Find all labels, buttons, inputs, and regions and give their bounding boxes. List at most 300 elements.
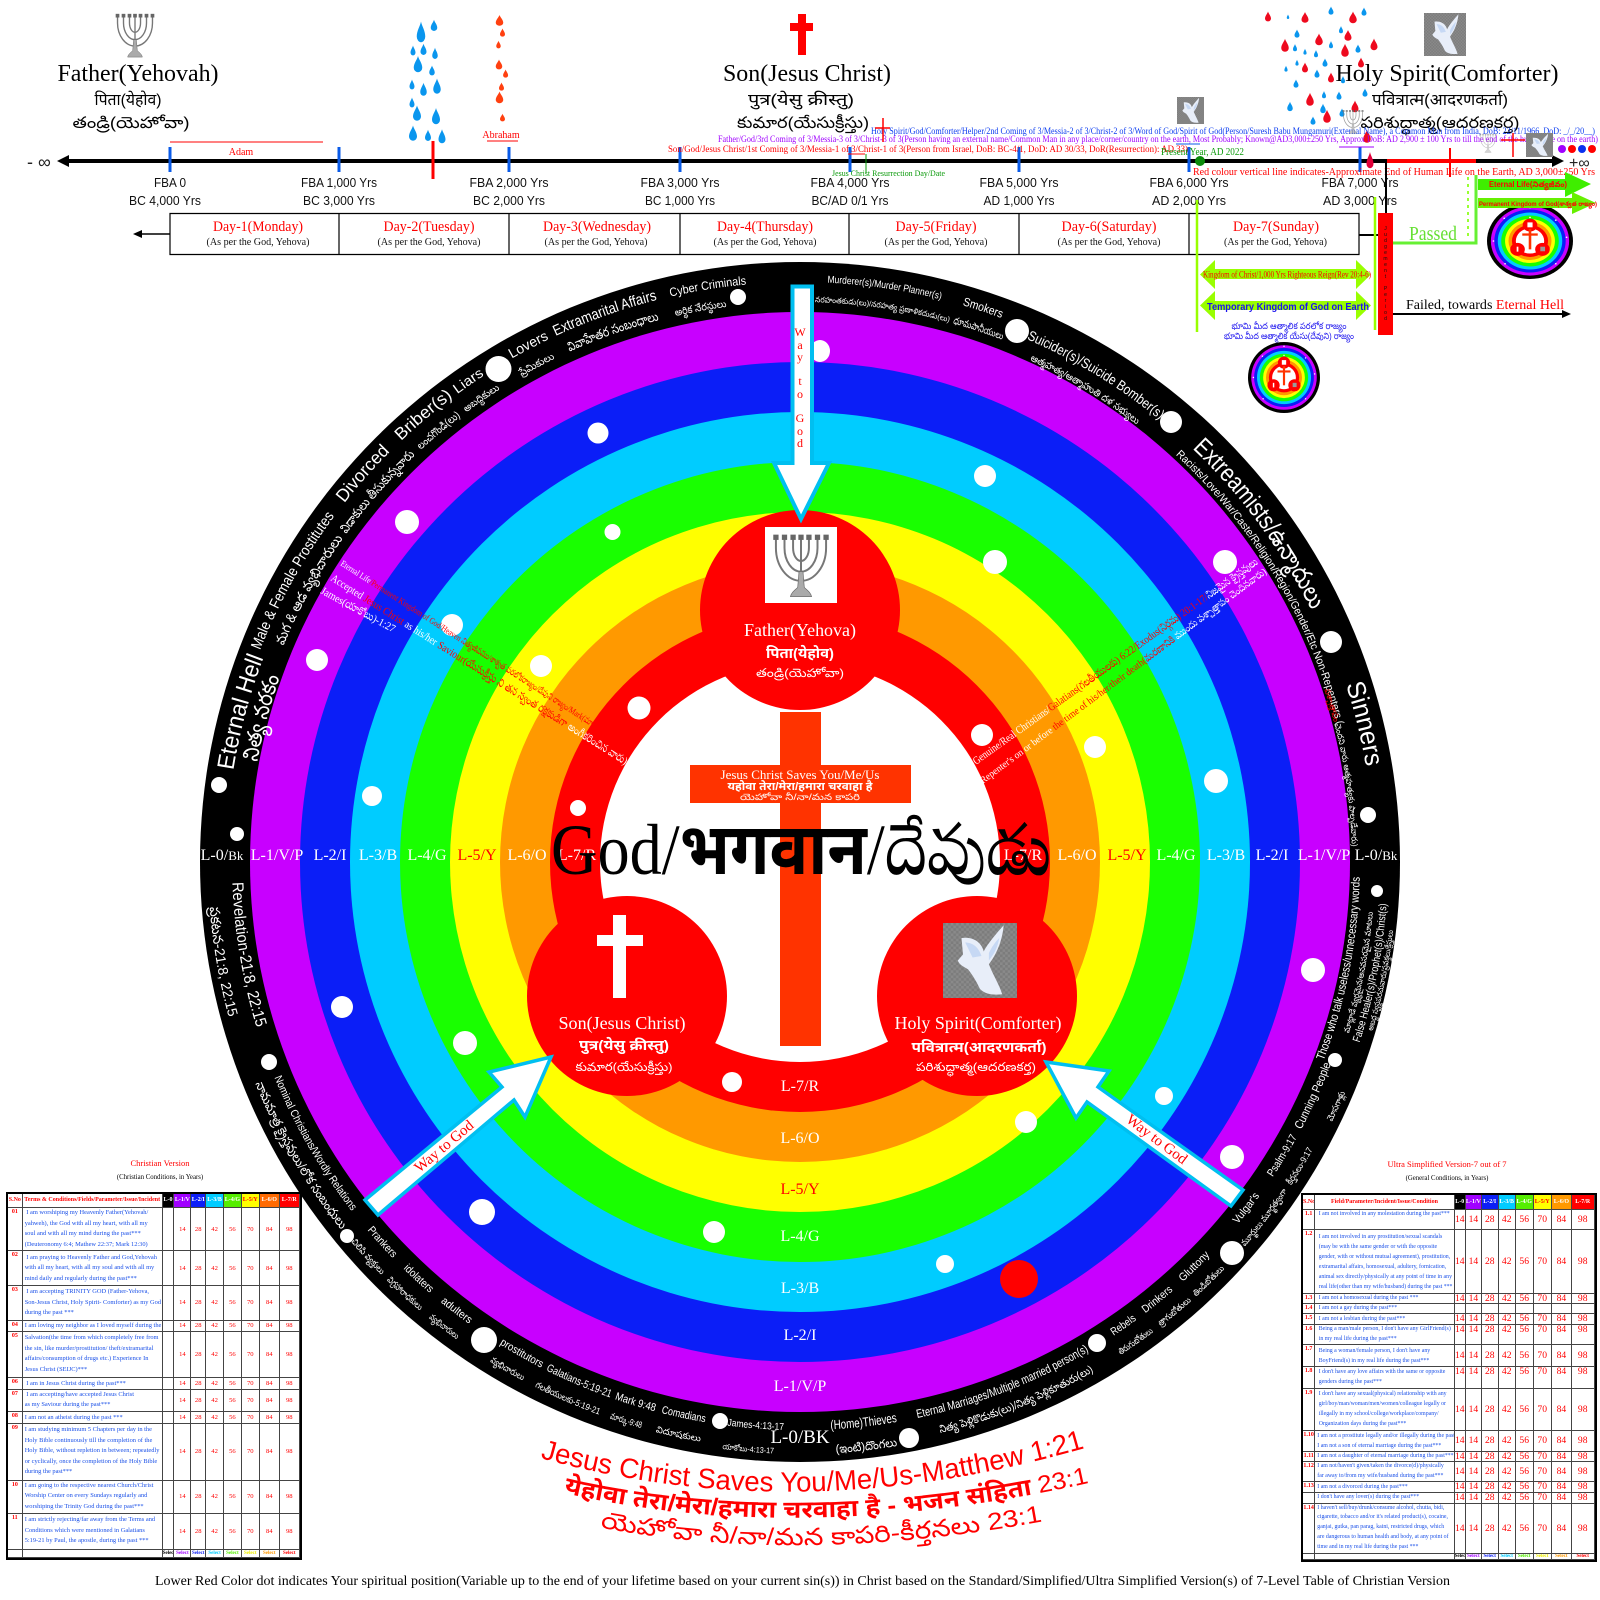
- ring label: Nominal Christians: Nominal Christians/Wordly Relations: [274, 1075, 356, 1210]
- table: Christian Version: 14: [179, 1322, 186, 1329]
- ring label: adulters: adulters: [441, 1298, 472, 1323]
- icon: white cross: [597, 915, 643, 998]
- table: Ultra Simplified Version: 14: [1455, 1350, 1465, 1361]
- table: Ultra Simplified Version: 14: [1455, 1214, 1465, 1225]
- bottom curved title: Hindi psalm: येहोवा तेरा/मेरा/हमारा चरवाहा है - भजन संहिता 23:1: [562, 1462, 1090, 1524]
- table: Ultra Simplified Version: 98: [1578, 1466, 1588, 1477]
- table: Christian Version: during the past ***: [25, 1309, 74, 1316]
- table: Ultra Simplified Version: 28: [1485, 1256, 1495, 1267]
- table: Ultra Simplified Version: 28: [1485, 1214, 1495, 1225]
- judgement period bar: t: [1385, 274, 1387, 280]
- table: Ultra Simplified Version: 1.14: [1303, 1505, 1314, 1511]
- table: Ultra Simplified Version: Select: [1555, 1554, 1568, 1559]
- arrow: way to God from lower left: Way to God: [412, 1117, 478, 1176]
- level labels: vertical column: L-0/BK: [770, 1427, 830, 1448]
- table: Christian Version: 01: [12, 1209, 18, 1215]
- table: Ultra Simplified Version: 1.1: [1305, 1211, 1312, 1217]
- table: Christian Version: Salvation(the time from which completely free from: [25, 1334, 158, 1341]
- heading: Father: Father(Yehovah): [58, 61, 218, 87]
- ring label: Cyber Criminals: [670, 276, 746, 318]
- table: Christian Version: 70: [247, 1299, 254, 1306]
- judgement period bar: n: [1384, 268, 1387, 274]
- table: Christian Version: 84: [266, 1322, 273, 1329]
- table: Christian Version: 56: [229, 1351, 236, 1358]
- table: Christian Version: 98: [286, 1299, 293, 1306]
- title: God in three scripts: God/भगवान/దేవుడు: [551, 810, 1051, 904]
- table: Christian Version: as my Saviour during the past***: [25, 1401, 110, 1408]
- table: Christian Version: 56: [229, 1226, 236, 1233]
- table: Christian Version: L-1/V: [175, 1197, 190, 1203]
- table: Christian Version: I am accepting TRINITY GOD (Father-Yehova,: [26, 1288, 149, 1295]
- ring label: Cunning People: Cunning People: [1291, 1060, 1334, 1131]
- level labels: horizontal row right: L-0/Bk: [1355, 847, 1398, 864]
- ring label: Briber(s): Briber(s): [394, 390, 452, 440]
- table: Ultra Simplified Version: L-1/V: [1466, 1198, 1481, 1204]
- heading: Ultra Simplified Version table: Ultra Simplified Version-7 out of 7: [1387, 1159, 1507, 1169]
- table: Christian Version: 42: [211, 1226, 218, 1233]
- table: Christian Version: 42: [211, 1322, 218, 1329]
- diagonal text: Accepted Jesus Christ and Eternal Life: Accepted Jesus Christ as his/her Saviour(యేసుక్రీస్తు ని తన స్వంత రక్షకుడిగా అంగీకరించిన వారు): [328, 572, 630, 768]
- timeline labels: AD 1,000 Yrs: [984, 193, 1055, 208]
- ring label: Mark: [610, 1392, 656, 1428]
- ring label: Vulgars: మూర్ఖులు మూర్ఖత్వంగా: [1239, 1186, 1289, 1248]
- table: Christian Version: 28: [195, 1528, 202, 1535]
- ring label: Eternal Marriages: Eternal Marriages/Multiple married person(s): [915, 1342, 1090, 1421]
- table: Christian Version: Select: [208, 1551, 221, 1556]
- table: Ultra Simplified Version: I don't have any love affairs with the same or opposite: [1319, 1369, 1445, 1375]
- icon: red drops (Abraham): [496, 15, 508, 121]
- ring label: Eternal Marriages: నిత్య పెళ్లికొడుకు(లు)/నిత్య పెళ్లికూతురు(లు): [938, 1364, 1095, 1436]
- table: Ultra Simplified Version: 1.6: [1305, 1326, 1312, 1332]
- heading: Christian Version table: [117, 1158, 203, 1181]
- bubble: Holy Spirit: [877, 896, 1077, 1096]
- day boxes: (As per the God, Yehova): [378, 237, 481, 248]
- judgement period bar: d: [1384, 316, 1387, 322]
- table: Ultra Simplified Version: 56: [1519, 1466, 1529, 1477]
- ring label: Lovers: Lovers: [508, 333, 548, 358]
- table: Christian Version: 5:19-21 by Paul, the apostle, during the past ***: [25, 1537, 149, 1544]
- table: Christian Version: 02: [12, 1252, 18, 1258]
- table: Ultra Simplified Version: 42: [1502, 1350, 1512, 1361]
- ring label: Gluttony: Gluttony: [1177, 1249, 1212, 1284]
- table: Christian Version: Select: [192, 1551, 204, 1556]
- table: Ultra Simplified Version: 84: [1557, 1435, 1566, 1446]
- ring label: Extramarital Affairs: వివాహేతర సంబంధాలు: [567, 314, 658, 352]
- black ring labels: lower half: [206, 877, 1394, 1456]
- bubble: Father: पिता(येहोव): [766, 644, 834, 661]
- table: Ultra Simplified Version: 56: [1519, 1523, 1529, 1534]
- table: Ultra Simplified Version: 56: [1519, 1256, 1529, 1267]
- table: Christian Version: I am accepting/have accepted Jesus Christ: [26, 1391, 134, 1398]
- bubble: Father: తండ్రి(యెహోవా): [756, 666, 844, 681]
- table: Christian Version: Holy Bible, without repletion in between; repeatedly: [25, 1447, 159, 1454]
- ring label: Thieves: [831, 1415, 897, 1456]
- ring label: Nominal Christians: నామమాత్ర క్రైస్తవులు/లోక సంబంధులు: [256, 1082, 344, 1229]
- kingdom: millennial double arrows: Temporary Kingdom of God on Earth: [1207, 302, 1369, 313]
- table: Christian Version: 84: [266, 1351, 273, 1358]
- table: Christian Version: 28: [195, 1299, 202, 1306]
- table: Christian Version: 56: [229, 1448, 236, 1455]
- judgement period bar: e: [1384, 250, 1387, 256]
- table: Christian Version: worshiping the Trinity God during the past***: [25, 1503, 144, 1510]
- ring label: Sinners: పశ్చాత్తాపం చెందని వారు ఆత్మహత్యకు పాల్పడేవారు): [1324, 688, 1358, 846]
- table: Christian Version: I am going to the respective nearest Church/Christ: [25, 1482, 153, 1489]
- table: Christian Version: I am studying minimum 5 Chapters per day in the: [25, 1426, 152, 1433]
- table: Ultra Simplified Version: L-2/I: [1483, 1198, 1496, 1204]
- timeline labels: FBA 1,000 Yrs: [301, 175, 377, 190]
- arrow: way to God from top: t: [798, 374, 802, 388]
- ring label: Gluttony: తిండిబోతులు: [1191, 1263, 1226, 1298]
- table: Christian Version: L-3/B: [207, 1197, 222, 1203]
- table: Christian Version: 42: [211, 1397, 218, 1404]
- table: Christian Version: 98: [286, 1322, 293, 1329]
- level labels: horizontal row right: L-1/V/P: [1298, 847, 1350, 864]
- ring label: Mark: మార్కు-9:48: [609, 1411, 643, 1430]
- table: Ultra Simplified Version: I am not involved in any molestation during the past***: [1319, 1211, 1450, 1217]
- table: Ultra Simplified Version: I am not a divorced during the past***: [1317, 1484, 1408, 1490]
- table: Christian Version: 56: [229, 1380, 236, 1387]
- table: Christian Version: 28: [195, 1380, 202, 1387]
- ring label: Male and Female Prostitutes: Male & Female Prostitutes: [250, 512, 334, 650]
- icon: red cross: [790, 14, 813, 55]
- emblem: mini circle middle: [1248, 342, 1320, 413]
- level labels: vertical column: L-2/I: [784, 1327, 816, 1344]
- table: Ultra Simplified Version: 56: [1519, 1404, 1529, 1415]
- table: Christian Version: Select: [244, 1551, 256, 1556]
- table: Christian Version: 98: [286, 1397, 293, 1404]
- emblem: mini circle right: [1487, 203, 1573, 279]
- ring label: Drinkers: [1141, 1287, 1191, 1328]
- arrow: way to God from lower left: [365, 1057, 551, 1215]
- arrow: way to God from top: W: [794, 325, 806, 339]
- heading: Father: पिता(येहोव): [94, 90, 162, 109]
- table: Christian Version: 14: [179, 1299, 186, 1306]
- table: Christian Version: 84: [266, 1493, 273, 1500]
- table: Ultra Simplified Version: [1301, 1193, 1597, 1562]
- table: Ultra Simplified Version: I am not a lesbian during the past***: [1319, 1316, 1405, 1322]
- day boxes: (As per the God, Yehova): [544, 237, 648, 248]
- table: Ultra Simplified Version: 70: [1537, 1523, 1547, 1534]
- arrow: way to God from top: o: [797, 424, 803, 438]
- table: Ultra Simplified Version: 70: [1537, 1350, 1547, 1361]
- day boxes: Day-7(Sunday): [1233, 219, 1319, 235]
- table: Ultra Simplified Version: 42: [1502, 1256, 1512, 1267]
- ring label: Prankers: Prankers: [368, 1226, 396, 1258]
- timeline labels: BC 1,000 Yrs: [645, 193, 715, 208]
- table: Ultra Simplified Version: extramarital affairs, homosexual, adultery, fornication,: [1319, 1264, 1446, 1270]
- table: Christian Version: affairs/consumption of drugs etc.) Experience In: [25, 1355, 148, 1362]
- ring label: Psalm: కీర్తనలు-9:17: [1284, 1146, 1315, 1186]
- level labels: vertical column: L-1/V/P: [774, 1378, 826, 1395]
- table: Christian Version: 70: [247, 1351, 254, 1358]
- table: Christian Version: 84: [266, 1414, 273, 1421]
- kingdom: millennial double arrows: Kingdom of Christ/1,000 Yrs Righteous Reign(Rev 20:4-6): [1203, 270, 1371, 280]
- table: Christian Version: 14: [179, 1265, 186, 1272]
- ring label: Psalm: [1266, 1134, 1312, 1185]
- table: Christian Version: L-0: [164, 1197, 173, 1203]
- table: Ultra Simplified Version: 98: [1578, 1256, 1588, 1267]
- timeline labels: BC/AD 0/1 Yrs: [812, 193, 889, 208]
- heading: Christian Version table: Christian Version: [130, 1158, 190, 1168]
- ring label: Prankers: చిలిపి వ్యక్తులు: [352, 1239, 384, 1274]
- table: Ultra Simplified Version: 14: [1469, 1404, 1478, 1415]
- table: Christian Version: 84: [266, 1448, 273, 1455]
- center cross: Jesus Christ Saves You/Me/Us: [721, 767, 879, 782]
- bubble: Son: [527, 896, 727, 1096]
- ring label: Divorced: విడాకులు తీసుకున్నవారు: [340, 451, 414, 534]
- timeline axis: - ∞: [27, 152, 51, 172]
- table: Christian Version: Jesus Christ (SEIJC)***: [25, 1366, 87, 1373]
- table: Christian Version: 28: [195, 1397, 202, 1404]
- ring label: Liars: అబద్ధికులు: [464, 386, 500, 412]
- arrow: way to God from top: y: [797, 350, 803, 364]
- table: Ultra Simplified Version: 98: [1578, 1435, 1588, 1446]
- ring label: James: James-4:13-17: [727, 1418, 785, 1433]
- ring label: prostitutors: వ్యభిచారులు: [490, 1358, 524, 1380]
- judgement period bar: [1378, 161, 1393, 335]
- level labels: vertical column: L-4/G: [780, 1228, 820, 1245]
- ring label: Liars: [452, 370, 500, 412]
- bottom curved title: Telugu psalm: యెహోవా నీ/నా/మన కాపరి-కీర్తనలు 23:1: [599, 1501, 1044, 1551]
- table: Christian Version: 98: [286, 1380, 293, 1387]
- ring label: Divorced: Divorced: [336, 443, 390, 502]
- table: Ultra Simplified Version: Field/Parameter/Incident/Issue/Condition: [1331, 1198, 1438, 1204]
- table: Ultra Simplified Version: gender, with or without mutual agreement), prostitution,: [1319, 1254, 1450, 1260]
- table: Christian Version: 06: [12, 1379, 18, 1385]
- table: Christian Version: 56: [229, 1322, 236, 1329]
- table: Ultra Simplified Version: 28: [1485, 1404, 1495, 1415]
- ring label: Smokers: Smokers: [963, 298, 1003, 318]
- judgement period bar: g: [1384, 244, 1387, 250]
- table: Ultra Simplified Version: 1.5: [1305, 1315, 1312, 1321]
- table: Christian Version: Select: [283, 1551, 296, 1556]
- table: Christian Version: 28: [195, 1448, 202, 1455]
- table: Ultra Simplified Version: Select: [1536, 1554, 1548, 1559]
- level labels: horizontal row left: L-7/R: [558, 847, 596, 864]
- table: Ultra Simplified Version: 98: [1578, 1523, 1588, 1534]
- table: Ultra Simplified Version: 1.13: [1303, 1483, 1314, 1489]
- table: Ultra Simplified Version: real life(other than my wife/husband) during the past ***: [1319, 1284, 1452, 1290]
- kingdom: millennial double arrows: భూమి మీద ఆత్మాలిక పరలోక రాజ్యం: [1232, 321, 1347, 333]
- heading: Father: తండ్రి(యెహోవా): [72, 114, 190, 133]
- timeline labels: [129, 175, 1399, 208]
- table: Christian Version: 56: [229, 1493, 236, 1500]
- white position dots: [211, 289, 1383, 1448]
- ring label: prostitutors: [490, 1340, 543, 1380]
- table: Ultra Simplified Version: 14: [1469, 1350, 1478, 1361]
- table: Christian Version: I am strictly rejecting/far away from the Terms and: [25, 1516, 155, 1523]
- marker: present year: [1161, 97, 1244, 166]
- table: Christian Version: 28: [195, 1226, 202, 1233]
- heading: Christian Version table: (Christian Conditions, in Years): [117, 1174, 203, 1181]
- timeline labels: BC 3,000 Yrs: [303, 193, 375, 208]
- day boxes: [133, 213, 1378, 255]
- marker: second coming and end of human life: [1339, 110, 1596, 177]
- table: Christian Version: 84: [266, 1265, 273, 1272]
- table: Christian Version: 84: [266, 1299, 273, 1306]
- table: Ultra Simplified Version: Select: [1576, 1554, 1589, 1559]
- ring label: Drinkers: త్రాగుబోతులు: [1156, 1295, 1193, 1329]
- table: Ultra Simplified Version: 56: [1519, 1214, 1529, 1225]
- table: Christian Version: I am not an atheist during the past ***: [25, 1414, 123, 1421]
- level labels: horizontal row right: L-4/G: [1156, 847, 1196, 864]
- bubble: Son: Son(Jesus Christ): [558, 1013, 686, 1034]
- table: Ultra Simplified Version: 28: [1485, 1523, 1495, 1534]
- small note: Son first coming: Son/God/Jesus Christ/1st Coming of 3/Messia-1 of 3/Christ-1 of 3(Person from Israel, DoB: BC-4/1, DoD: AD 30/33, DoR(Resurrection): AD 33): [668, 144, 1188, 155]
- table: Ultra Simplified Version: 14: [1469, 1435, 1478, 1446]
- judgement period bar: r: [1385, 298, 1387, 304]
- level labels: vertical column: L-6/O: [780, 1130, 820, 1147]
- table: Ultra Simplified Version: far away to/from my wife/husband during the past***: [1317, 1473, 1443, 1479]
- ring label: idolaters: idolaters: [404, 1263, 433, 1292]
- level labels: horizontal row left: L-3/B: [359, 847, 397, 864]
- table: Christian Version: 08: [12, 1413, 18, 1419]
- table: Christian Version: 84: [266, 1397, 273, 1404]
- icon: menorah in bubble: [773, 535, 829, 597]
- table: Ultra Simplified Version: 42: [1502, 1466, 1512, 1477]
- table: Christian Version: 98: [286, 1226, 293, 1233]
- icon: dove in bubble: [943, 923, 1017, 998]
- table: Ultra Simplified Version: 1.2: [1305, 1231, 1312, 1237]
- table: Christian Version: Son-Jesus Christ, Holy Spirit- Comforter) as my God: [25, 1299, 161, 1306]
- arrow: way to God from top: G: [796, 411, 805, 425]
- level labels: vertical column: L-5/Y: [780, 1181, 820, 1198]
- ring label: Thieves: (Home)Thieves: [830, 1410, 898, 1432]
- heading: Son: पुत्र(येसु क्रीस्तु): [748, 90, 854, 110]
- bubble: Father: [700, 510, 900, 710]
- outcome: Eternal Life and Permanent Kingdom: Eternal Life(నిత్యజీవం): [1489, 180, 1567, 191]
- table: Christian Version: 70: [247, 1414, 254, 1421]
- judgement period bar: e: [1384, 262, 1387, 268]
- period markers: Adam and Abraham: Abraham: [482, 130, 520, 141]
- table: Ultra Simplified Version: 42: [1502, 1214, 1512, 1225]
- level labels: horizontal row left: L-0/Bk: [201, 847, 244, 864]
- table: Christian Version: Terms & Conditions/Fields/Parameter/Issue/Incident: [24, 1197, 160, 1203]
- table: Christian Version: 56: [229, 1414, 236, 1421]
- table: Christian Version: 14: [179, 1351, 186, 1358]
- table: Christian Version: 42: [211, 1299, 218, 1306]
- heading: Holy Spirit: पवित्रात्म(आदरणकर्ता): [1372, 90, 1508, 109]
- ring label: Rebels: [1110, 1316, 1153, 1354]
- red position dot: [1000, 1260, 1038, 1298]
- table: Ultra Simplified Version: 84: [1557, 1350, 1566, 1361]
- ring label: Gluttony: [1179, 1251, 1224, 1296]
- table: Ultra Simplified Version: 28: [1485, 1350, 1495, 1361]
- ring label: Rebels: Rebels: [1109, 1312, 1139, 1338]
- table: Ultra Simplified Version: 42: [1502, 1523, 1512, 1534]
- table: Ultra Simplified Version: 42: [1502, 1404, 1512, 1415]
- judgement period bar: e: [1384, 292, 1387, 298]
- ring label: Extramarital Affairs: Extramarital Affairs: [552, 292, 656, 336]
- table: Christian Version: I am in Jesus Christ during the past***: [26, 1380, 126, 1387]
- ring label: Suiciders: Suicider(s)/Suicide Bomber(s): [1028, 331, 1164, 420]
- table: Christian Version: 09: [12, 1425, 18, 1431]
- table: Christian Version: 42: [211, 1493, 218, 1500]
- level labels: horizontal row right: L-5/Y: [1107, 847, 1147, 864]
- outcome: Passed: Passed: [1409, 223, 1457, 245]
- ring label: Prankers: [352, 1226, 396, 1274]
- heading: Son: [723, 14, 891, 134]
- table: Ultra Simplified Version: L-3/B: [1499, 1198, 1514, 1204]
- table: Ultra Simplified Version: L-4/G: [1517, 1198, 1532, 1204]
- table: Ultra Simplified Version: are dangerous to human health and body, at any point of: [1317, 1534, 1449, 1540]
- ring label: Comadians: [656, 1406, 706, 1442]
- ring label: Lovers: [508, 333, 554, 378]
- ring label: Male and Female Prostitutes: మగ & ఆడ వ్యభిచారులు: [276, 536, 342, 645]
- table: Christian Version: Holy Bible continuously till the completion of the: [25, 1437, 152, 1444]
- arrow: way to God from top: o: [797, 387, 803, 401]
- table: Christian Version: 11: [12, 1515, 18, 1521]
- table: Christian Version: the sin, like murder/prostitution/ theft/extramarital: [25, 1345, 153, 1352]
- heading: Son: కుమార(యేసుక్రీస్తు): [737, 114, 869, 134]
- table: Christian Version: 14: [179, 1380, 186, 1387]
- timeline labels: FBA 5,000 Yrs: [980, 175, 1059, 190]
- timeline labels: FBA 6,000 Yrs: [1150, 175, 1229, 190]
- timeline labels: BC 4,000 Yrs: [129, 193, 201, 208]
- level labels: vertical column: L-7/R: [781, 1078, 819, 1095]
- table: Ultra Simplified Version: L-0: [1455, 1198, 1464, 1204]
- ring label: Revelation: [206, 883, 267, 1026]
- ring label: prostitutors: prostitutors: [498, 1340, 543, 1368]
- table: Ultra Simplified Version: ganjai, gutka, pan parag, kaini, restricted drugs, which: [1317, 1524, 1444, 1530]
- table: Christian Version: 42: [211, 1351, 218, 1358]
- table: Ultra Simplified Version: Being a woman/female person, I don't have any: [1319, 1348, 1430, 1354]
- table: Ultra Simplified Version: 70: [1537, 1256, 1547, 1267]
- table: Christian Version: 70: [247, 1322, 254, 1329]
- table: Ultra Simplified Version: 98: [1578, 1404, 1588, 1415]
- ring label: Extreamists: Extreamists/ఉన్మాదులు: [1194, 437, 1320, 608]
- table: Christian Version: Worship Center on every Sundays regularly and: [25, 1492, 147, 1499]
- table: Christian Version: 14: [179, 1226, 186, 1233]
- table: Christian Version: 04: [12, 1322, 18, 1328]
- table: Christian Version: 28: [195, 1322, 202, 1329]
- day boxes: Day-2(Tuesday): [384, 219, 475, 235]
- table: Ultra Simplified Version: 1.9: [1305, 1390, 1312, 1396]
- table: Ultra Simplified Version: L-6/O: [1554, 1198, 1569, 1204]
- level labels: horizontal row right: [1004, 847, 1398, 864]
- table: Ultra Simplified Version: BoyFriend(s) in my real life during the past***: [1319, 1358, 1429, 1364]
- ring label: Comadians: Comadians: [660, 1404, 707, 1425]
- arrow: way to God from lower right: Way to God: [1123, 1112, 1190, 1168]
- table: Ultra Simplified Version: S.No: [1303, 1198, 1315, 1204]
- ring label: adulters: వ్యభిచారులు: [429, 1314, 458, 1339]
- table: Christian Version: 70: [247, 1380, 254, 1387]
- center cross: యెహోవా నీ/నా/మన కాపరి: [740, 792, 861, 802]
- outcome: Failed towards Eternal Hell: Failed, towards Eternal Hell: [1406, 298, 1564, 313]
- outcome: Eternal Life and Permanent Kingdom: [1478, 172, 1597, 214]
- table: Christian Version: Select: [176, 1551, 189, 1556]
- bubble: Father: Father(Yehova): [744, 620, 856, 641]
- judgement period bar: o: [1384, 310, 1387, 316]
- ring label: Galatians: Galatians-5:19-21: [547, 1364, 611, 1398]
- table: Christian Version: 70: [247, 1265, 254, 1272]
- marker: present year: Present Year, AD 2022: [1161, 147, 1244, 158]
- period markers: Adam and Abraham: Adam: [229, 147, 253, 158]
- ring label: Galatians: గలతీయులకు-5:19-21: [536, 1382, 600, 1414]
- outcome: Passed: [1393, 175, 1476, 245]
- table: Ultra Simplified Version: 84: [1557, 1256, 1566, 1267]
- level labels: horizontal row right: L-6/O: [1057, 847, 1097, 864]
- table: Ultra Simplified Version: (may be with the same gender or with the opposite: [1319, 1244, 1437, 1250]
- icon: drops cloud (red and blue): [1265, 6, 1378, 143]
- ring label: False Healers: False Healer(s)/Prophet(s)/Christ(s): [1351, 903, 1390, 1044]
- table: Ultra Simplified Version: I am not a gay during the past***: [1319, 1305, 1397, 1311]
- table: Christian Version: 42: [211, 1265, 218, 1272]
- day boxes: (As per the God, Yehova): [1058, 237, 1161, 248]
- table: Christian Version: 14: [179, 1528, 186, 1535]
- level labels: vertical column: [770, 1078, 830, 1448]
- level labels: vertical column: L-3/B: [781, 1280, 819, 1297]
